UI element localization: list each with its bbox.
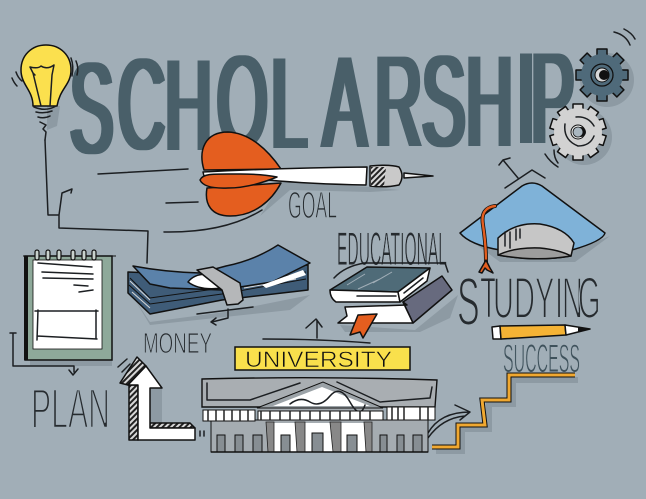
infographic canvas: GOAL [288,185,337,227]
icon: pencil [492,325,591,339]
icon: dark gear [576,29,635,107]
label: money: MONEY [143,328,212,360]
connector: bulb wire to money [45,140,148,263]
icon: stack of money [128,245,310,325]
label: plan: PLAN [31,377,110,441]
icon: light bulb [12,45,78,140]
dart motion lines [98,169,262,232]
bracket arrow: notebook to plan [10,333,78,375]
icon: books [330,267,458,338]
icon: L-shaped arrow [118,357,204,440]
icon: dart [200,132,433,216]
icon: light gear [545,104,612,167]
title: SCHOLARSHIP [70,25,574,181]
up arrow above banner [263,319,370,343]
label: studying: TUDYING [480,265,601,331]
label: university banner: UNIVERSITY [245,347,392,372]
label: studying: S [457,264,480,340]
heading: educational [334,222,448,278]
icon: orange stairs [432,375,578,451]
icon: notebook [23,250,116,366]
curved arrow [428,405,470,438]
icon: graduation cap [460,158,610,273]
icon: university building [202,378,437,452]
